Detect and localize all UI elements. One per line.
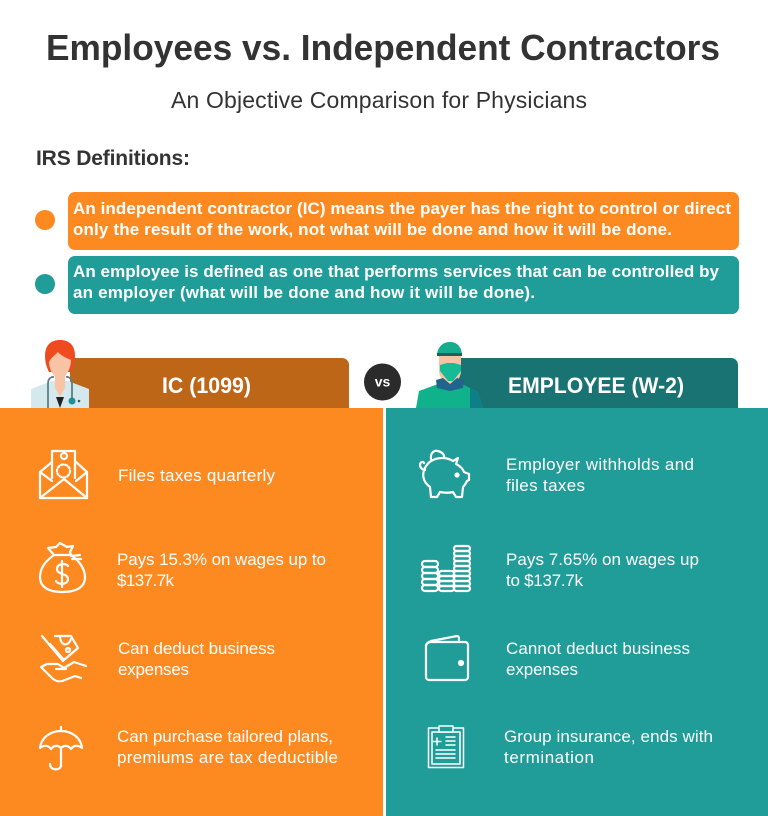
header tab: Employee (W-2): EMPLOYEE (W-2): [508, 373, 684, 398]
header tab: Employee (W-2): [459, 358, 738, 408]
icon: umbrella: [40, 727, 82, 769]
text: can purchase plans: Can purchase tailored plans,: [117, 727, 333, 746]
definition: employee: [35, 256, 739, 314]
icon: coin stacks: [422, 546, 470, 591]
title: Employees vs. Independent Contractors: [46, 27, 720, 68]
definition: independent contractor: An independent contractor (IC) means the payer has the right to control or direct: [73, 199, 731, 218]
text: can deduct: [118, 639, 275, 679]
text: group insurance: [504, 727, 713, 767]
icon: piggy bank: [420, 451, 469, 497]
text: group insurance: Group insurance, ends with: [504, 727, 713, 746]
icon: envelope with money: [40, 451, 87, 498]
text: pays 15.3%: Pays 15.3% on wages up to: [117, 550, 326, 569]
icon: doctor avatar: [31, 340, 89, 408]
text: can deduct: Can deduct business: [118, 639, 275, 658]
text: can purchase plans: premiums are tax deductible: [117, 748, 338, 767]
definition: employee: an employer (what will be done and how it will be done).: [73, 283, 535, 302]
text: can deduct: expenses: [118, 660, 189, 679]
subtitle: An Objective Comparison for Physicians: [171, 87, 587, 113]
text: employer withholds: [506, 455, 694, 495]
panel: Employee column: [386, 408, 768, 816]
badge: vs: [364, 364, 401, 400]
text: pays 7.65%: to $137.7k: [506, 571, 584, 590]
heading: IRS definitions: IRS Definitions:: [36, 147, 190, 170]
badge: vs: vs: [375, 374, 390, 390]
panel: IC column: [0, 408, 383, 816]
icon: hand receiving money: [41, 636, 86, 681]
icon: clipboard: [428, 726, 464, 768]
text: can purchase plans: [117, 727, 338, 767]
definition: employee: An employee is defined as one that performs services that can be controlled by: [73, 262, 720, 281]
text: files taxes: Files taxes quarterly: [118, 466, 276, 485]
text: employer withholds: files taxes: [506, 476, 585, 495]
text: pays 15.3%: [117, 550, 326, 590]
definition: independent contractor: [35, 192, 739, 250]
header tab: IC (1099): [70, 358, 349, 408]
icon: wallet: [426, 636, 468, 680]
text: cannot deduct: Cannot deduct business: [506, 639, 690, 658]
text: employer withholds: Employer withholds and: [506, 455, 694, 474]
icon: money bag: [40, 543, 85, 592]
icon: surgeon avatar: [416, 342, 483, 408]
text: group insurance: termination: [504, 748, 594, 767]
text: cannot deduct: [506, 639, 690, 679]
text: pays 7.65%: Pays 7.65% on wages up: [506, 550, 699, 569]
header tab: IC (1099): IC (1099): [162, 373, 251, 398]
definition: independent contractor: only the result of the work, not what will be done and how it will be done.: [73, 220, 672, 239]
text: pays 15.3%: $137.7k: [117, 571, 174, 590]
text: cannot deduct: expenses: [506, 660, 578, 679]
text: pays 7.65%: [506, 550, 699, 590]
